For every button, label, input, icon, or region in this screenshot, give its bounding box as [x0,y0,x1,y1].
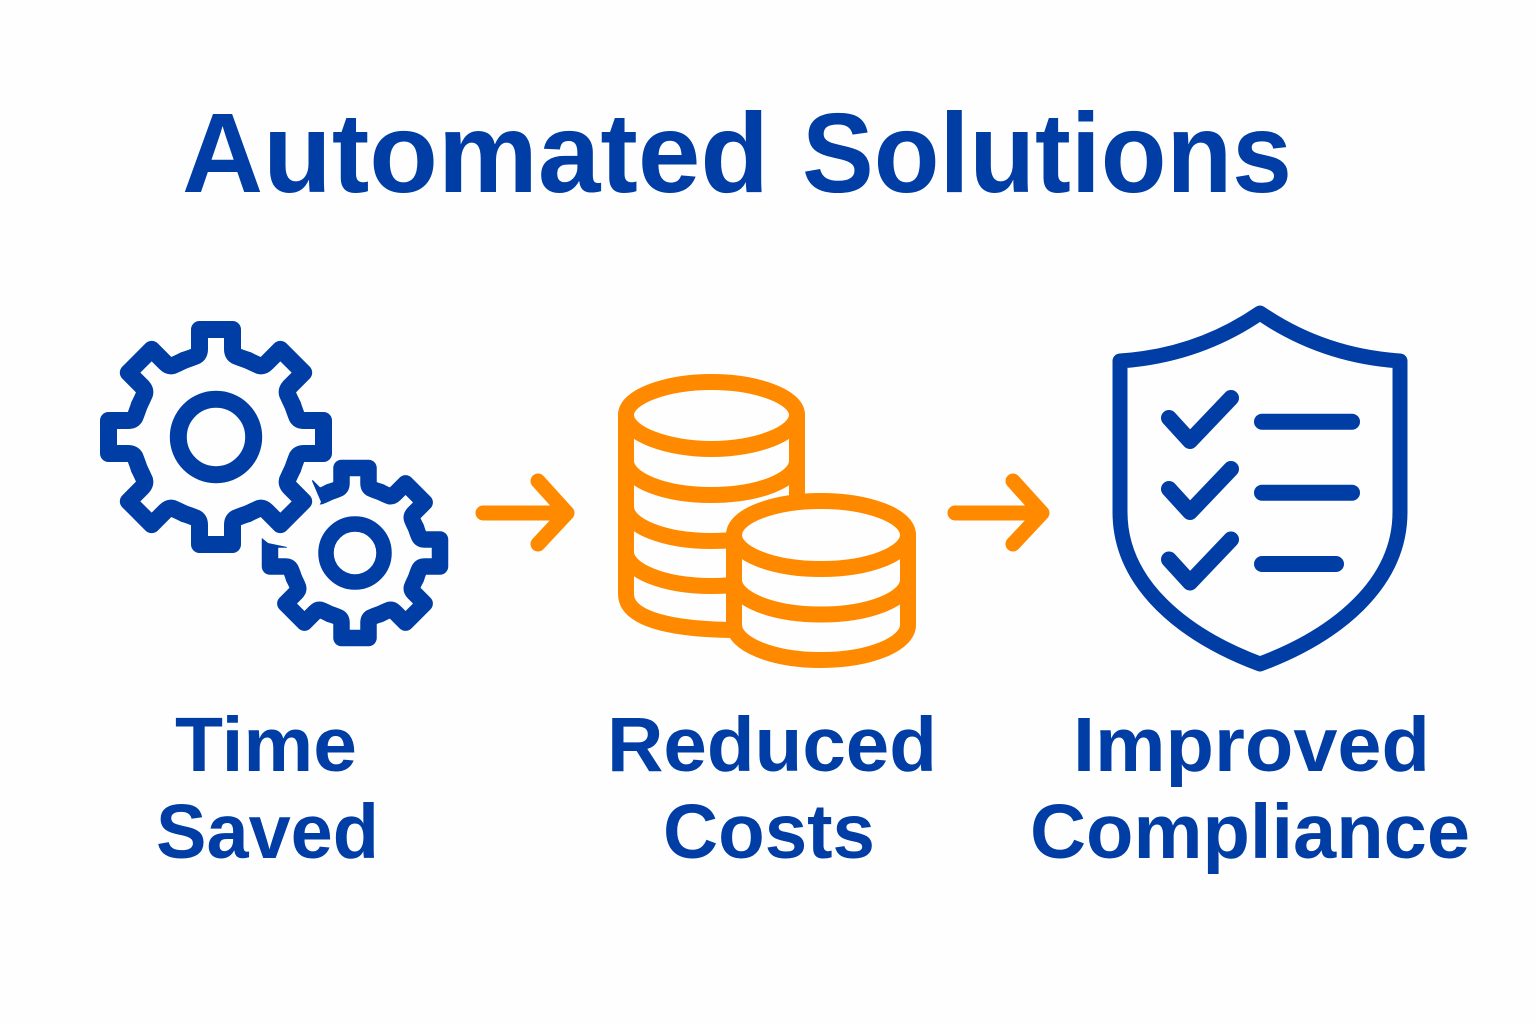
large gear [108,330,324,544]
label: reduced costs: Reduced [607,702,937,788]
icon: gears [108,330,440,638]
label: improved compliance: Improved [1073,702,1430,788]
checklist row 1 [1169,398,1352,441]
label: improved compliance: Compliance [1030,789,1470,875]
title: Solutions [802,90,1292,216]
small gear [270,468,440,638]
label: time saved: Saved [156,789,379,875]
back coin stack [626,382,797,630]
arrow: time to costs [483,481,567,544]
gap between gears [240,440,321,552]
checklist row 3 [1169,540,1336,582]
front coin stack [734,501,908,660]
icon: shield checklist [1120,313,1400,664]
icon: coin stacks [626,382,908,660]
label: time saved: Time [175,702,357,788]
label: improved compliance [1030,702,1470,875]
shield outline [1120,313,1400,664]
label: reduced costs: Costs [663,789,875,875]
label: reduced costs [607,702,937,875]
checklist row 2 [1169,469,1352,512]
label: time saved [156,702,379,875]
title: Automated [182,90,769,216]
title [182,90,1292,216]
arrow: costs to compliance [955,481,1042,544]
